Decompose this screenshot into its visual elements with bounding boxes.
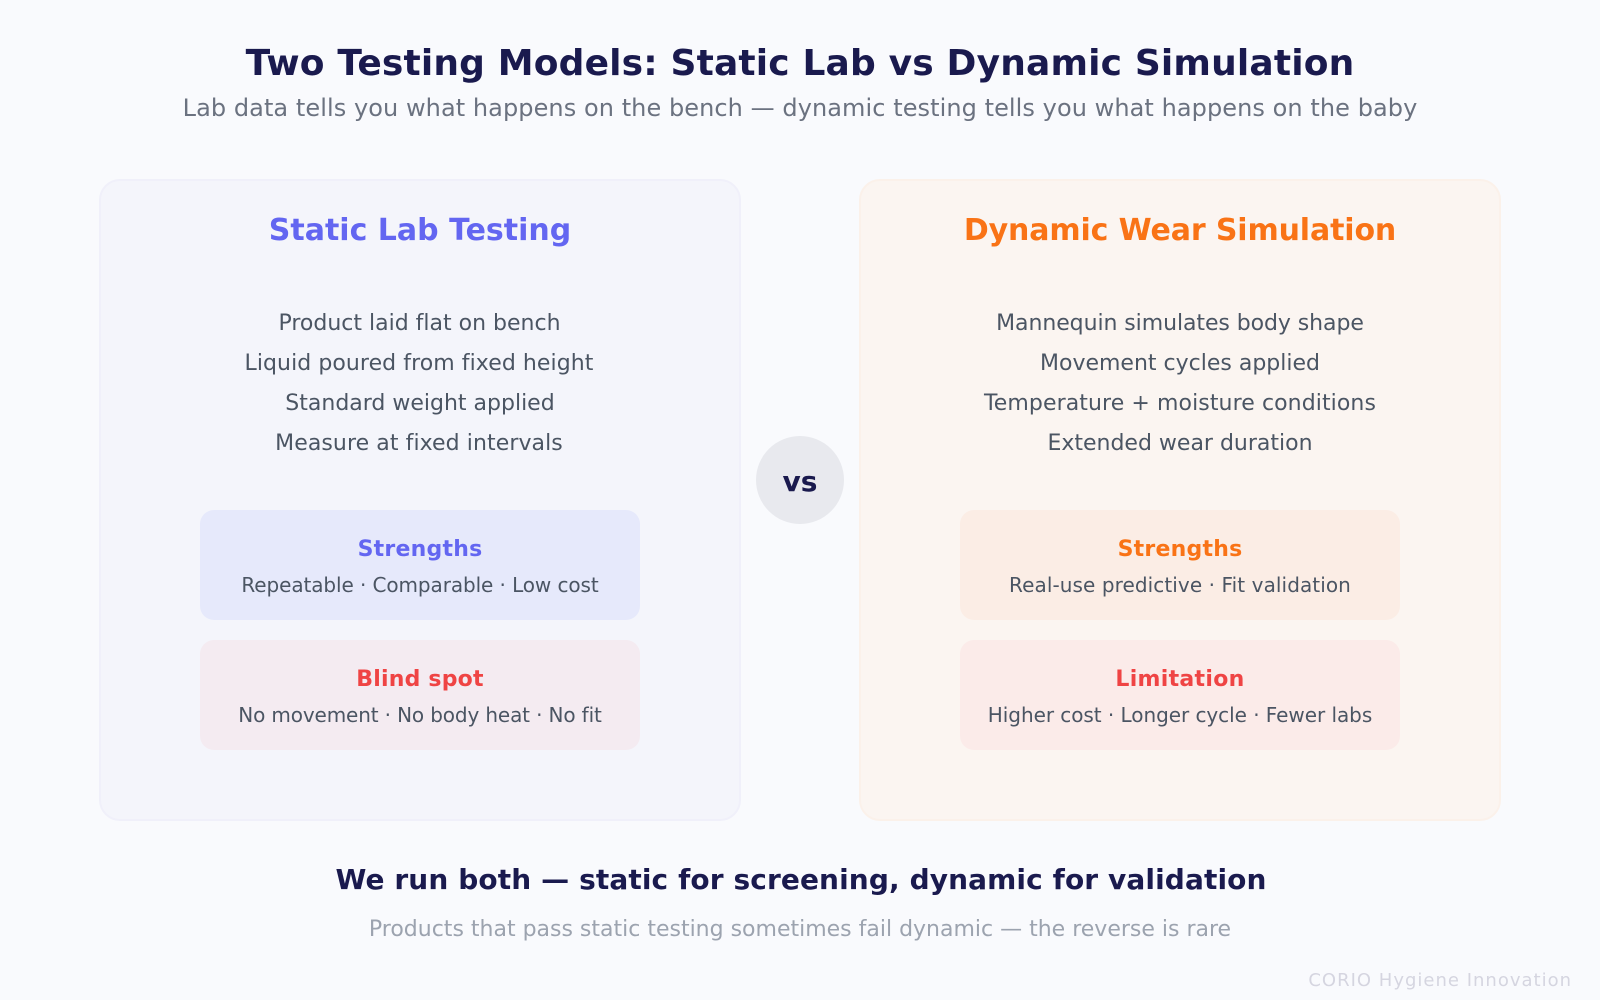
conclusion note: Products that pass static testing sometimes fail dynamic — the reverse is rare [369,917,1231,942]
method list: static: Measure at fixed intervals [275,431,563,456]
strengths box: dynamic: Real-use predictive · Fit validation [1009,573,1351,597]
panel: static lab testing [99,179,741,821]
limitation box: Higher cost · Longer cycle · Fewer labs [988,703,1372,727]
method list: static: Product laid flat on bench [278,311,561,336]
method list: dynamic: Extended wear duration [1047,431,1313,456]
strengths box: static: Strengths [358,537,482,562]
panel heading: dynamic: Dynamic Wear Simulation [964,213,1396,248]
blind spot box: Blind spot [356,667,484,692]
method list: dynamic [984,311,1376,456]
method list: dynamic: Movement cycles applied [1040,351,1320,376]
vs badge: vs [783,465,817,498]
blind spot box [200,640,640,750]
strengths box: static: Repeatable · Comparable · Low cost [241,573,599,597]
strengths box: dynamic: Strengths [1118,537,1242,562]
method list: dynamic: Mannequin simulates body shape [996,311,1364,336]
subtitle: Lab data tells you what happens on the bench — dynamic testing tells you what happens on the baby [183,94,1417,122]
method list: static: Standard weight applied [285,391,555,416]
limitation box: Limitation [1115,667,1245,692]
watermark: CORIO Hygiene Innovation [1308,970,1572,991]
method list: dynamic: Temperature + moisture conditions [984,391,1376,416]
conclusion heading: We run both — static for screening, dynamic for validation [335,863,1267,896]
vs badge [756,436,844,524]
panel: dynamic wear simulation [859,179,1501,821]
title: Two Testing Models: Static Lab vs Dynamic Simulation [246,43,1354,84]
blind spot box: No movement · No body heat · No fit [238,703,602,727]
panel heading: static: Static Lab Testing [269,213,571,248]
method list: static: Liquid poured from fixed height [245,351,593,376]
method list: static [245,311,593,456]
strengths box: static [200,510,640,620]
strengths box: dynamic [960,510,1400,620]
limitation box [960,640,1400,750]
